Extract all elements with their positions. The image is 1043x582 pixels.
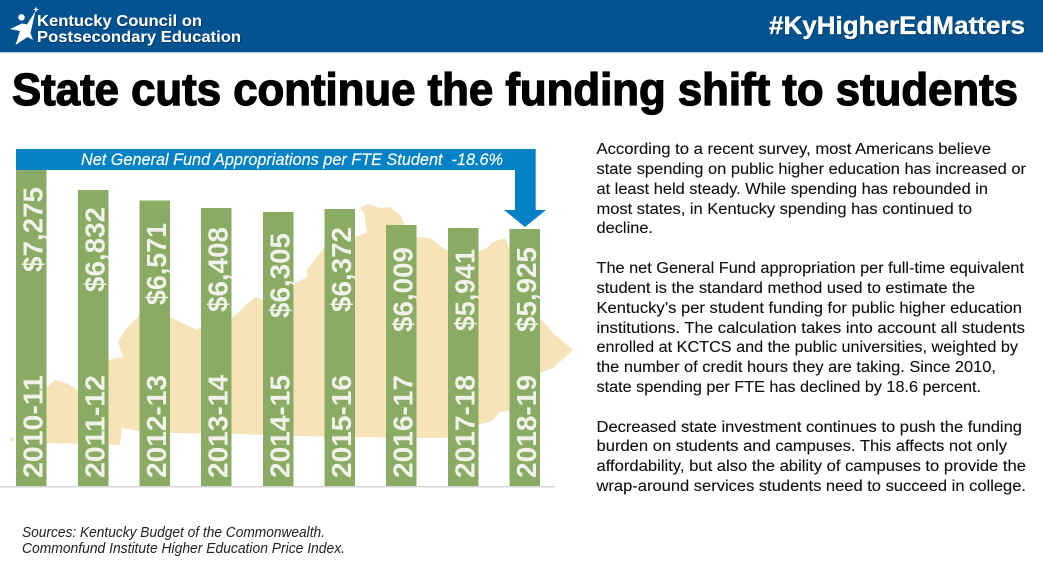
bar 2012-13: $6,571 [141, 223, 172, 305]
bar 2013-14 [201, 208, 234, 486]
bar 2010-11: $7,275 [18, 187, 48, 272]
bar 2014-15: 2014-15 [264, 375, 296, 478]
bar 2016-17 [386, 225, 418, 486]
bar 2018-19: $5,925 [511, 247, 542, 332]
text block: paragraph 1: most states, in Kentucky spending has continued to [596, 201, 972, 218]
text block: paragraph 1: decline. [596, 220, 653, 237]
bar 2017-18: 2017-18 [450, 375, 480, 478]
bar 2011-12 [78, 190, 110, 486]
bar 2014-15 [263, 212, 296, 486]
bar 2016-17: 2016-17 [388, 375, 418, 478]
bar 2016-17: $6,009 [388, 247, 418, 332]
bar 2018-19 [510, 229, 542, 486]
bar 2011-12: $6,832 [80, 207, 110, 292]
arrow label: Net General Fund Appropriations per FTE Student -18.6% [81, 151, 503, 169]
bar 2015-16 [324, 209, 357, 486]
text block: paragraph 3: affordability, but also the ability of campuses to provide the [596, 458, 1026, 475]
text block: paragraph 3 [595, 419, 1026, 495]
bar 2017-18 [448, 228, 480, 486]
bar 2012-13: 2012-13 [141, 375, 172, 478]
map: western tip [10, 438, 14, 442]
text block: paragraph 2: institutions. The calculation takes into account all students [596, 320, 1025, 337]
logo text: Postsecondary Education [37, 29, 241, 46]
text block: paragraph 1: According to a recent survey, most Americans believe [596, 141, 991, 158]
sources note: Sources: Kentucky Budget of the Commonwealth. [22, 525, 325, 541]
bar chart: appropriations per FTE student [0, 149, 573, 488]
bar 2013-14: 2013-14 [202, 375, 234, 478]
text block: paragraph 3: burden on students and campuses. This affects not only [596, 438, 1007, 455]
map of Kentucky [30, 204, 573, 445]
bar 2015-16: 2015-16 [326, 375, 357, 478]
bar 2012-13 [140, 200, 172, 486]
text block: paragraph 2: the number of credit hours they are taking. Since 2010, [596, 359, 996, 376]
text block: paragraph 2: Kentucky’s per student funding for public higher education [596, 300, 1022, 317]
text block: paragraph 2: enrolled at KCTCS and the public universities, weighted by [596, 339, 1018, 356]
hashtag: #KyHigherEdMatters [769, 12, 1025, 40]
header banner [0, 0, 1043, 53]
bar 2018-19: 2018-19 [511, 375, 542, 478]
text block: paragraph 2: state spending per FTE has declined by 18.6 percent. [596, 379, 981, 396]
bar 2015-16: $6,372 [326, 227, 357, 312]
logo text: Kentucky Council on [37, 13, 202, 30]
title: State cuts continue the funding shift to students [12, 64, 1018, 115]
text block: paragraph 1 [596, 141, 1026, 237]
text block: paragraph 3: wrap-around services students need to succeed in college. [595, 478, 1026, 495]
text block: paragraph 3: Decreased state investment continues to push the funding [596, 419, 1022, 436]
bar 2017-18: $5,941 [450, 249, 480, 331]
text block: paragraph 2 [596, 260, 1025, 396]
text block: paragraph 1: at least held steady. While spending has rebounded in [596, 181, 988, 198]
logo text [37, 13, 241, 46]
bar 2010-11: 2010-11 [18, 375, 48, 478]
bar 2013-14: $6,408 [202, 227, 234, 312]
text block: paragraph 2: student is the standard method used to estimate the [596, 280, 975, 297]
icon: logo star figure [10, 6, 39, 45]
bar 2010-11 [16, 168, 48, 486]
bar 2014-15: $6,305 [264, 233, 296, 318]
sources note: Commonfund Institute Higher Education Price Index. [22, 541, 345, 557]
sources note [22, 525, 345, 557]
bar 2011-12: 2011-12 [80, 375, 110, 478]
text block: paragraph 2: The net General Fund appropriation per full-time equivalent [596, 260, 1025, 277]
text block: paragraph 1: state spending on public higher education has increased or [596, 161, 1026, 178]
arrow: decline band [16, 149, 546, 227]
axis line [0, 486, 555, 488]
